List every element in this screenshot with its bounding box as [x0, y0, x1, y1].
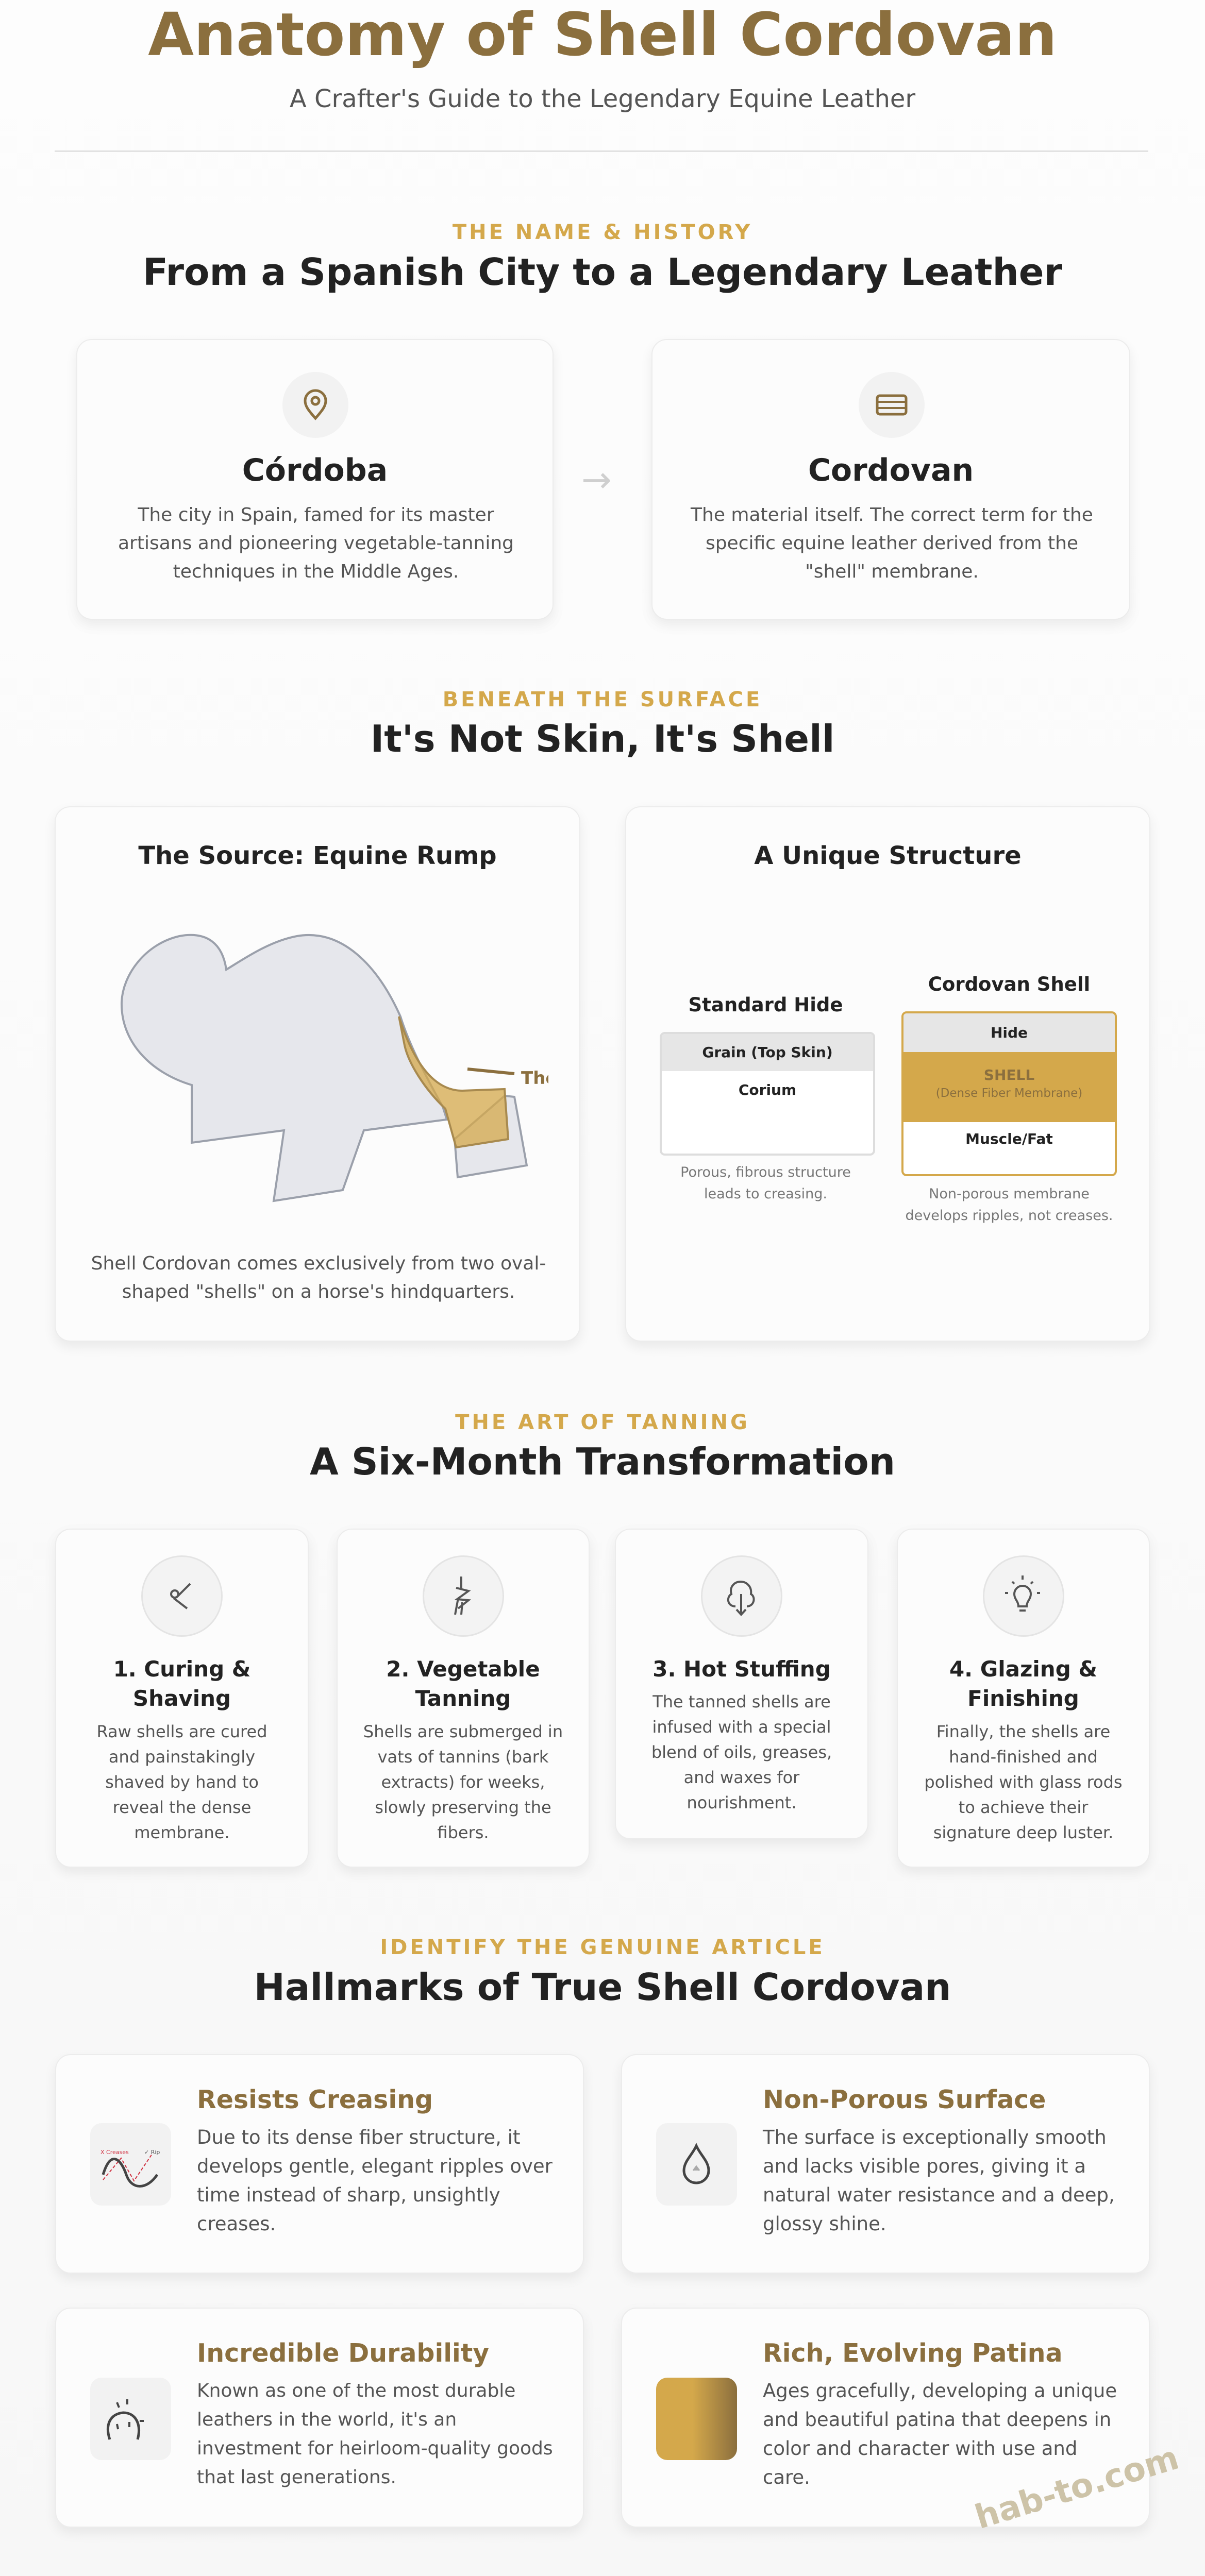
diagram: horse rump: The — [521, 1068, 557, 1089]
icon: water drop — [656, 2123, 737, 2206]
heading: hallmarks: Hallmarks of True Shell Cordovan — [254, 1965, 951, 2009]
title: step 1: Shaving — [133, 1686, 231, 1711]
text: durability — [197, 2380, 553, 2488]
heading: structure: A Unique Structure — [754, 841, 1022, 870]
diagram: cordovan layers: (Dense Fiber Membrane) — [936, 1087, 1082, 1100]
watermark: hab-to.com — [970, 2439, 1183, 2537]
section label: beneath the surface: BENEATH THE SURFACE — [443, 688, 762, 711]
panel: step 1 — [55, 1529, 309, 1868]
icon: ripple chart: X Creases — [101, 2149, 129, 2156]
caption: standard hide: Porous, fibrous structure leads to creasing. — [680, 1164, 851, 1202]
label: cordovan shell: Cordovan Shell — [928, 973, 1090, 995]
diagram: horse rump — [121, 934, 548, 1202]
icon: ripple chart — [90, 2123, 171, 2206]
title: step 2: 2. Vegetable — [386, 1656, 540, 1682]
title: resists creasing: Resists Creasing — [197, 2085, 433, 2114]
panel: resists creasing — [55, 2054, 584, 2274]
text: step 4: Finally, the shells are hand-finished and polished with glass rods to achieve their signature deep luster. — [924, 1722, 1123, 1842]
diagram: standard hide layers: Grain (Top Skin) — [702, 1044, 833, 1061]
title: step 4: Finishing — [967, 1686, 1079, 1711]
panel: step 2 — [337, 1529, 590, 1868]
title: durability: Incredible Durability — [197, 2338, 489, 2368]
text: durability: that last generations. — [197, 2467, 396, 2488]
diagram: cordovan layers: Hide — [991, 1024, 1028, 1041]
heading: source: The Source: Equine Rump — [138, 841, 497, 870]
title: patina: Rich, Evolving Patina — [763, 2338, 1063, 2368]
diagram: cordovan layers: Muscle/Fat — [965, 1130, 1053, 1147]
heading: six-month: A Six-Month Transformation — [310, 1440, 895, 1483]
text: patina: Ages gracefully, developing a unique and beautiful patina that deepens in color and character with use and care. — [763, 2380, 1117, 2488]
panel: patina — [621, 2308, 1150, 2528]
diagram: standard hide layers — [660, 1032, 875, 1156]
text: Cordovan: The material itself. The correct term for the specific equine leather derived from the "shell" membrane. — [691, 504, 1093, 582]
text: step 1: Raw shells are cured and painstakingly shaved by hand to reveal the dense membrane. — [97, 1722, 267, 1842]
panel: step 3 — [615, 1529, 868, 1839]
title: non-porous: Non-Porous Surface — [763, 2085, 1046, 2114]
diagram: cordovan layers — [901, 1011, 1117, 1176]
heading: name & history: From a Spanish City to a Legendary Leather — [143, 250, 1062, 294]
icon: leaf — [423, 1555, 504, 1637]
title: step 2: Tanning — [415, 1686, 511, 1711]
text: Cordoba: The city in Spain, famed for its master artisans and pioneering vegetable-tanning techniques in the Middle Ages. — [118, 504, 514, 582]
text: durability: leathers in the world, it's an — [197, 2409, 457, 2430]
label: standard hide: Standard Hide — [689, 994, 843, 1016]
title: step 1 — [113, 1656, 250, 1711]
arrow: → — [581, 459, 612, 501]
diagram: standard hide layers: Corium — [739, 1081, 796, 1098]
section label: name & history: THE NAME & HISTORY — [453, 221, 752, 244]
title: step 3: 3. Hot Stuffing — [652, 1656, 831, 1682]
text: durability: Known as one of the most durable — [197, 2380, 515, 2401]
caption: cordovan: Non-porous membrane develops ripples, not creases. — [905, 1186, 1113, 1224]
text: resists creasing: Due to its dense fiber structure, it develops gentle, elegant ripples over time instead of sharp, unsightly creases. — [197, 2126, 553, 2235]
heading: not skin: It's Not Skin, It's Shell — [371, 717, 834, 760]
icon: light bulb — [983, 1555, 1064, 1637]
icon: map pin — [282, 372, 348, 438]
text: durability: investment for heirloom-quality goods — [197, 2438, 553, 2459]
icon: cloud download — [701, 1555, 782, 1637]
panel: non-porous — [621, 2054, 1150, 2274]
heading: Cordovan: Cordovan — [808, 452, 974, 488]
icon: leather — [859, 372, 925, 438]
panel: step 4 — [897, 1529, 1150, 1868]
text: non-porous: The surface is exceptionally smooth and lacks visible pores, giving it a natural water resistance and a deep, glossy shine. — [763, 2126, 1115, 2235]
title: Anatomy of Shell Cordovan — [148, 1, 1057, 70]
panel: source — [55, 806, 580, 1342]
text: step 3: The tanned shells are infused with a special blend of oils, greases, and waxes for nourishment. — [651, 1692, 832, 1812]
section label: identify: IDENTIFY THE GENUINE ARTICLE — [380, 1936, 825, 1959]
caption: source: Shell Cordovan comes exclusively from two oval-shaped "shells" on a horse's hindquarters. — [91, 1253, 546, 1302]
heading: Cordoba: Córdoba — [242, 452, 388, 488]
title: step 4: 4. Glazing & — [949, 1656, 1097, 1682]
section label: art of tanning: THE ART OF TANNING — [455, 1411, 750, 1434]
panel: structure — [625, 806, 1150, 1342]
panel: Cordovan — [651, 339, 1130, 620]
panel: Cordoba — [76, 339, 554, 620]
title: step 4 — [949, 1656, 1097, 1711]
icon: ripple chart: ✓ Rip — [144, 2149, 160, 2156]
icon: patina swatch — [656, 2378, 737, 2460]
title: step 2 — [386, 1656, 540, 1711]
text: step 2: Shells are submerged in vats of tannins (bark extracts) for weeks, slowly preserving the fibers. — [363, 1722, 563, 1842]
icon: knife — [141, 1555, 223, 1637]
subtitle: A Crafter's Guide to the Legendary Equine Leather — [290, 84, 915, 113]
diagram: cordovan layers: SHELL — [984, 1066, 1034, 1083]
panel: durability — [55, 2308, 584, 2528]
icon: gauge — [90, 2378, 171, 2460]
title: step 1: 1. Curing & — [113, 1656, 250, 1682]
